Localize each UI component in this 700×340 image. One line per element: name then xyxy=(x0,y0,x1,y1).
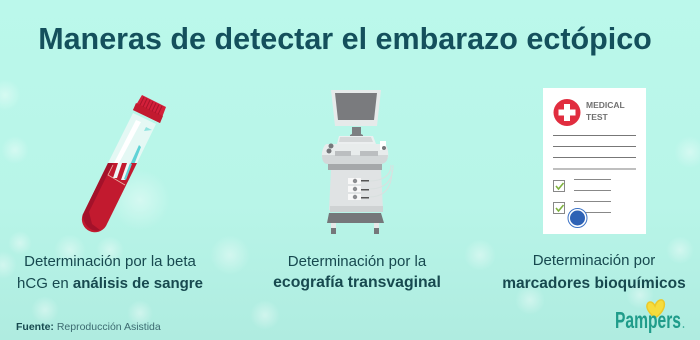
neck xyxy=(350,127,363,140)
text: biochemical markers: marcadores bioquímicos xyxy=(502,275,686,292)
text lines xyxy=(553,136,636,158)
text: blood test: Determinación por la beta xyxy=(24,253,196,270)
text: biochemical markers: Determinación por xyxy=(533,252,655,269)
title: Maneras de detectar el embarazo ectópico xyxy=(38,22,652,56)
console xyxy=(337,136,376,144)
monitor xyxy=(331,90,381,126)
checkboxes xyxy=(554,180,564,192)
text: ultrasound: Determinación por la xyxy=(288,253,426,270)
text: blood test: hCG en análisis de sangre xyxy=(17,275,203,292)
cap xyxy=(133,95,166,123)
label: medical test xyxy=(586,100,625,122)
text: ultrasound xyxy=(273,253,441,291)
label: medical test: MEDICAL xyxy=(586,100,625,110)
body xyxy=(328,164,382,170)
text: ultrasound: ecografía transvaginal xyxy=(273,274,441,291)
blue stamp xyxy=(568,208,587,228)
red cross badge xyxy=(554,99,580,126)
glass xyxy=(108,113,156,163)
text: biochemical markers xyxy=(502,252,686,292)
text: blood test xyxy=(17,253,203,292)
cables xyxy=(369,165,393,197)
label: medical test: TEST xyxy=(586,112,608,122)
blood xyxy=(82,163,137,232)
source note: Fuente: Reproducción Asistida xyxy=(16,321,161,333)
control modules xyxy=(348,178,369,200)
base and wheels xyxy=(327,213,384,223)
